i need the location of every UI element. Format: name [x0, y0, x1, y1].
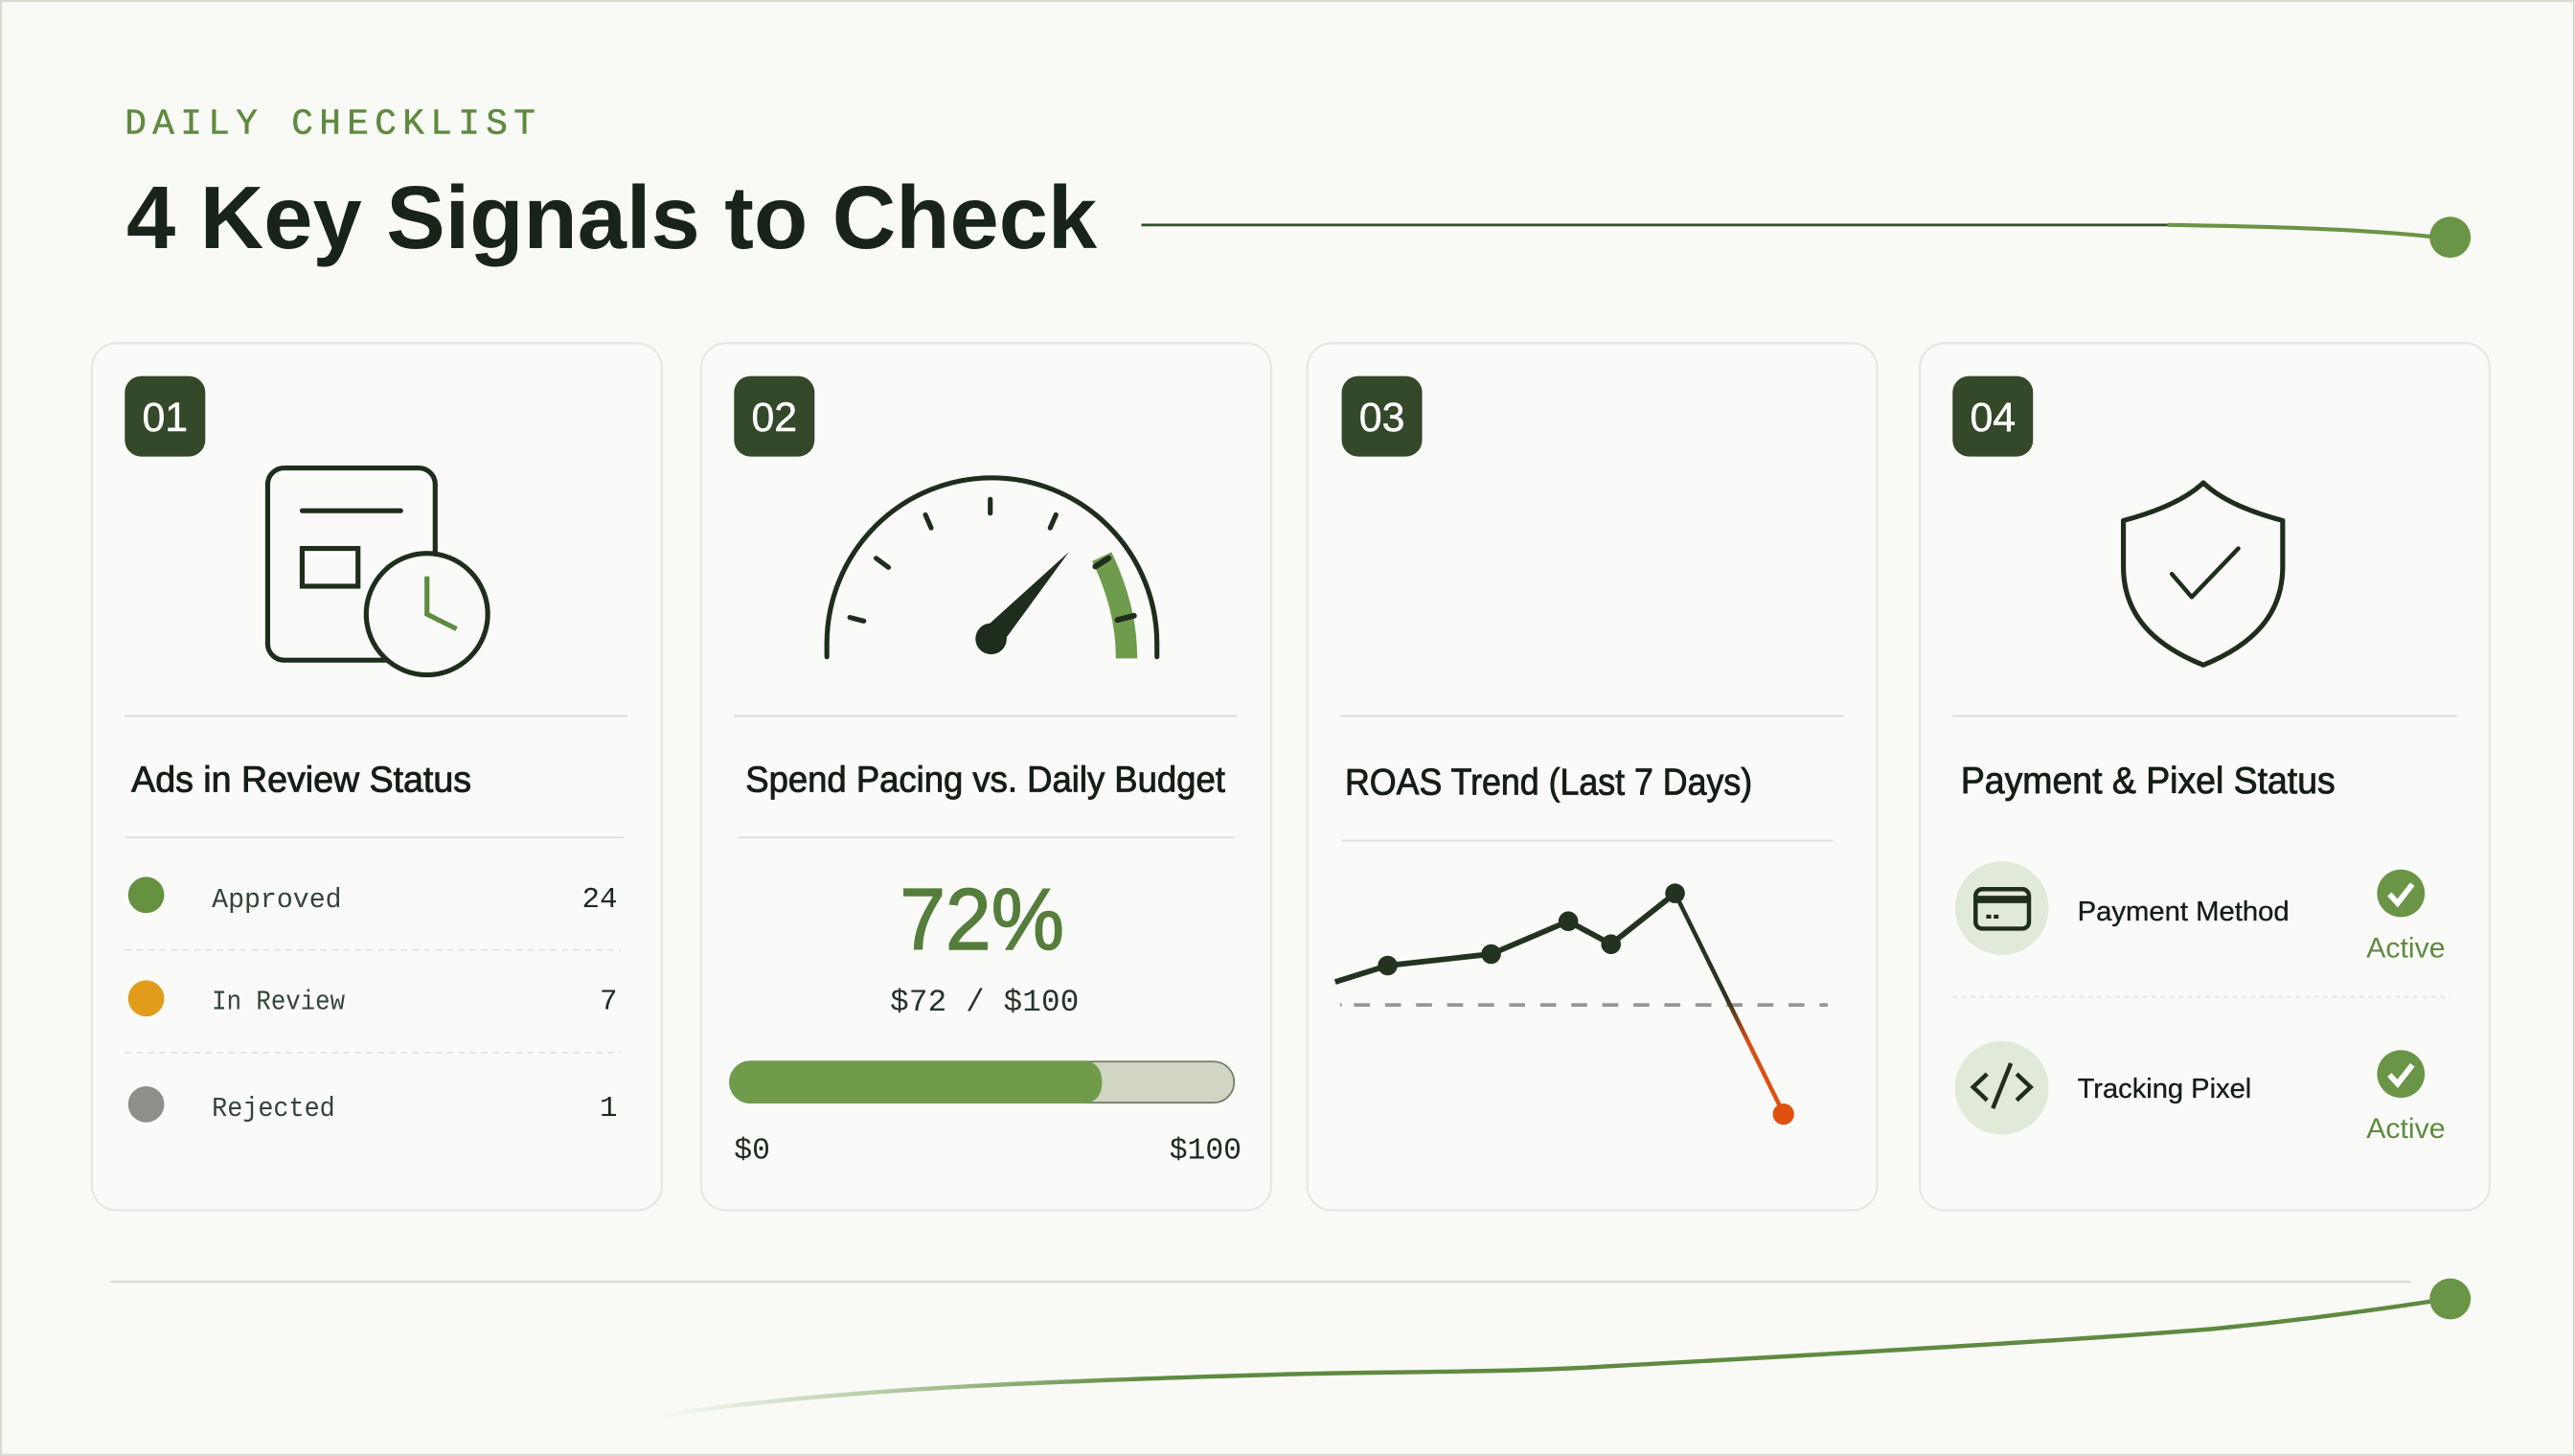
panel: spend pacing — [701, 343, 1271, 1210]
card heading: ROAS Trend (Last 7 Days) — [1345, 762, 1752, 804]
row: payment method: Payment Method — [2078, 897, 2290, 927]
footer divider and growth curve — [110, 1279, 2471, 1417]
bar scale labels — [734, 1134, 1242, 1168]
card heading: Payment & Pixel Status — [1961, 761, 2336, 802]
row: in review: In Review — [212, 986, 345, 1017]
row: rejected: 1 — [600, 1092, 618, 1126]
row: tracking pixel: Active — [2366, 1113, 2446, 1145]
card heading: Spend Pacing vs. Daily Budget — [745, 759, 1225, 799]
row: rejected: Rejected — [212, 1093, 335, 1125]
row: in review — [128, 980, 618, 1018]
step badge 03: 03 — [1359, 395, 1404, 441]
card heading: Ads in Review Status — [131, 759, 471, 799]
header accent line — [1141, 216, 2471, 258]
icon: credit card — [1975, 889, 2029, 928]
big percent value: 72% — [900, 872, 1064, 968]
eyebrow label: DAILY CHECKLIST — [125, 105, 536, 146]
step badge 01 — [125, 376, 205, 457]
panel: payment and pixel status — [1920, 343, 2490, 1210]
icon: document with clock — [267, 468, 488, 675]
row: in review: 7 — [600, 985, 618, 1018]
row: approved: 24 — [582, 883, 618, 917]
step badge 04 — [1952, 376, 2033, 457]
panel: ads in review status — [92, 343, 662, 1210]
row: tracking pixel: Tracking Pixel — [2078, 1074, 2251, 1104]
row: approved — [128, 876, 618, 917]
bar scale labels: $0 — [734, 1134, 770, 1168]
row: tracking pixel — [1955, 1041, 2446, 1145]
step badge 02 — [734, 376, 814, 457]
step badge 04: 04 — [1970, 395, 2016, 441]
step badge 03 — [1342, 376, 1423, 457]
line chart — [1335, 883, 1828, 1125]
progress bar — [729, 1060, 1234, 1103]
row: payment method: Active — [2366, 932, 2446, 964]
step badge 01: 01 — [142, 395, 188, 441]
icon: code brackets — [1973, 1063, 2031, 1108]
panel: roas trend — [1308, 343, 1877, 1210]
spend amount: $72 / $100 — [890, 985, 1079, 1020]
title: 4 Key Signals to Check — [126, 168, 1098, 267]
icon: shield with check — [2124, 483, 2283, 665]
row: approved: Approved — [212, 884, 342, 916]
bar scale labels: $100 — [1170, 1134, 1242, 1168]
icon: speedometer gauge — [827, 478, 1157, 658]
step badge 02: 02 — [751, 395, 797, 441]
row: rejected — [128, 1086, 618, 1126]
row: payment method — [1955, 861, 2446, 964]
